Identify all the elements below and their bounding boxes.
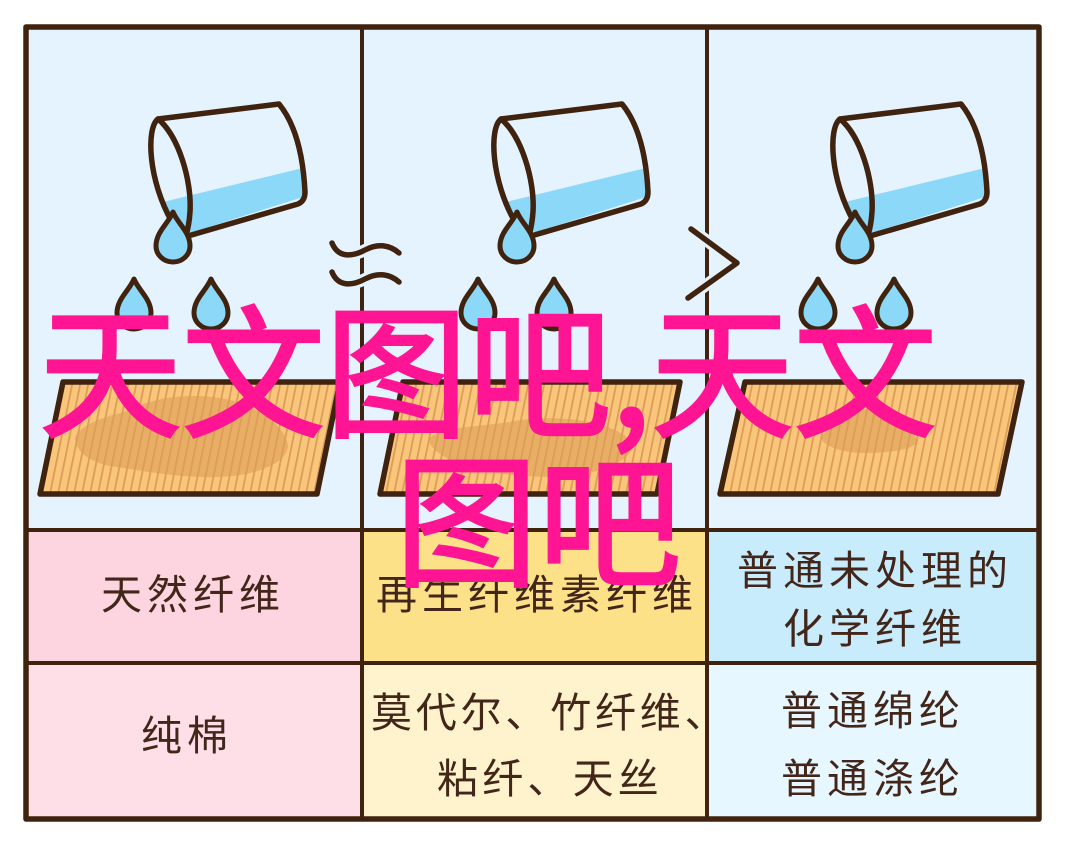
title overlay: 图吧 [395,410,681,617]
text: ordinary untreated chemical fibre: 普通未处理的 [737,548,1013,594]
cell: cotton [26,663,362,819]
text: natural fibre: 天然纤维 [101,572,285,618]
text: ordinary nylon and polyester: 普通绵纶 [781,688,965,734]
text: pure cotton: 纯棉 [141,713,233,759]
icon: panel 2 tilted cup with drops [461,104,648,329]
icon: approximately equal sign [332,243,399,284]
text: ordinary nylon and polyester [781,688,965,802]
text: ordinary nylon and polyester: 普通涤纶 [781,756,965,802]
cell: chemical fibre header [707,530,1039,663]
title overlay: 天文图吧,天文 [39,261,937,468]
cell: modal bamboo [362,663,707,819]
cell: regenerated fibre header [362,530,707,663]
text: ordinary untreated chemical fibre [737,548,1013,652]
illustration: panel 2 mat with medium stain [380,382,680,494]
panel: top illustration cells [26,27,1039,530]
cell: nylon polyester [707,663,1039,819]
text: modal, bamboo, viscose, tencel: 莫代尔、竹纤维、 [371,690,729,736]
text: modal, bamboo, viscose, tencel: 粘纤、天丝 [437,756,663,802]
text: regenerated cellulose fibre: 再生纤维素纤维 [376,572,698,618]
illustration: panel 3 mat with small stain [720,382,1022,494]
title overlay [39,261,937,617]
icon: greater-than sign [688,229,737,298]
illustration: panel 1 mat with large stain [40,382,340,494]
cell: natural fibre header [26,530,362,663]
text: ordinary untreated chemical fibre: 化学纤维 [783,606,967,652]
icon: panel 1 tilted cup with drops [117,104,305,329]
text: modal, bamboo, viscose, tencel [371,690,729,802]
icon: panel 3 tilted cup with drops [801,104,987,329]
